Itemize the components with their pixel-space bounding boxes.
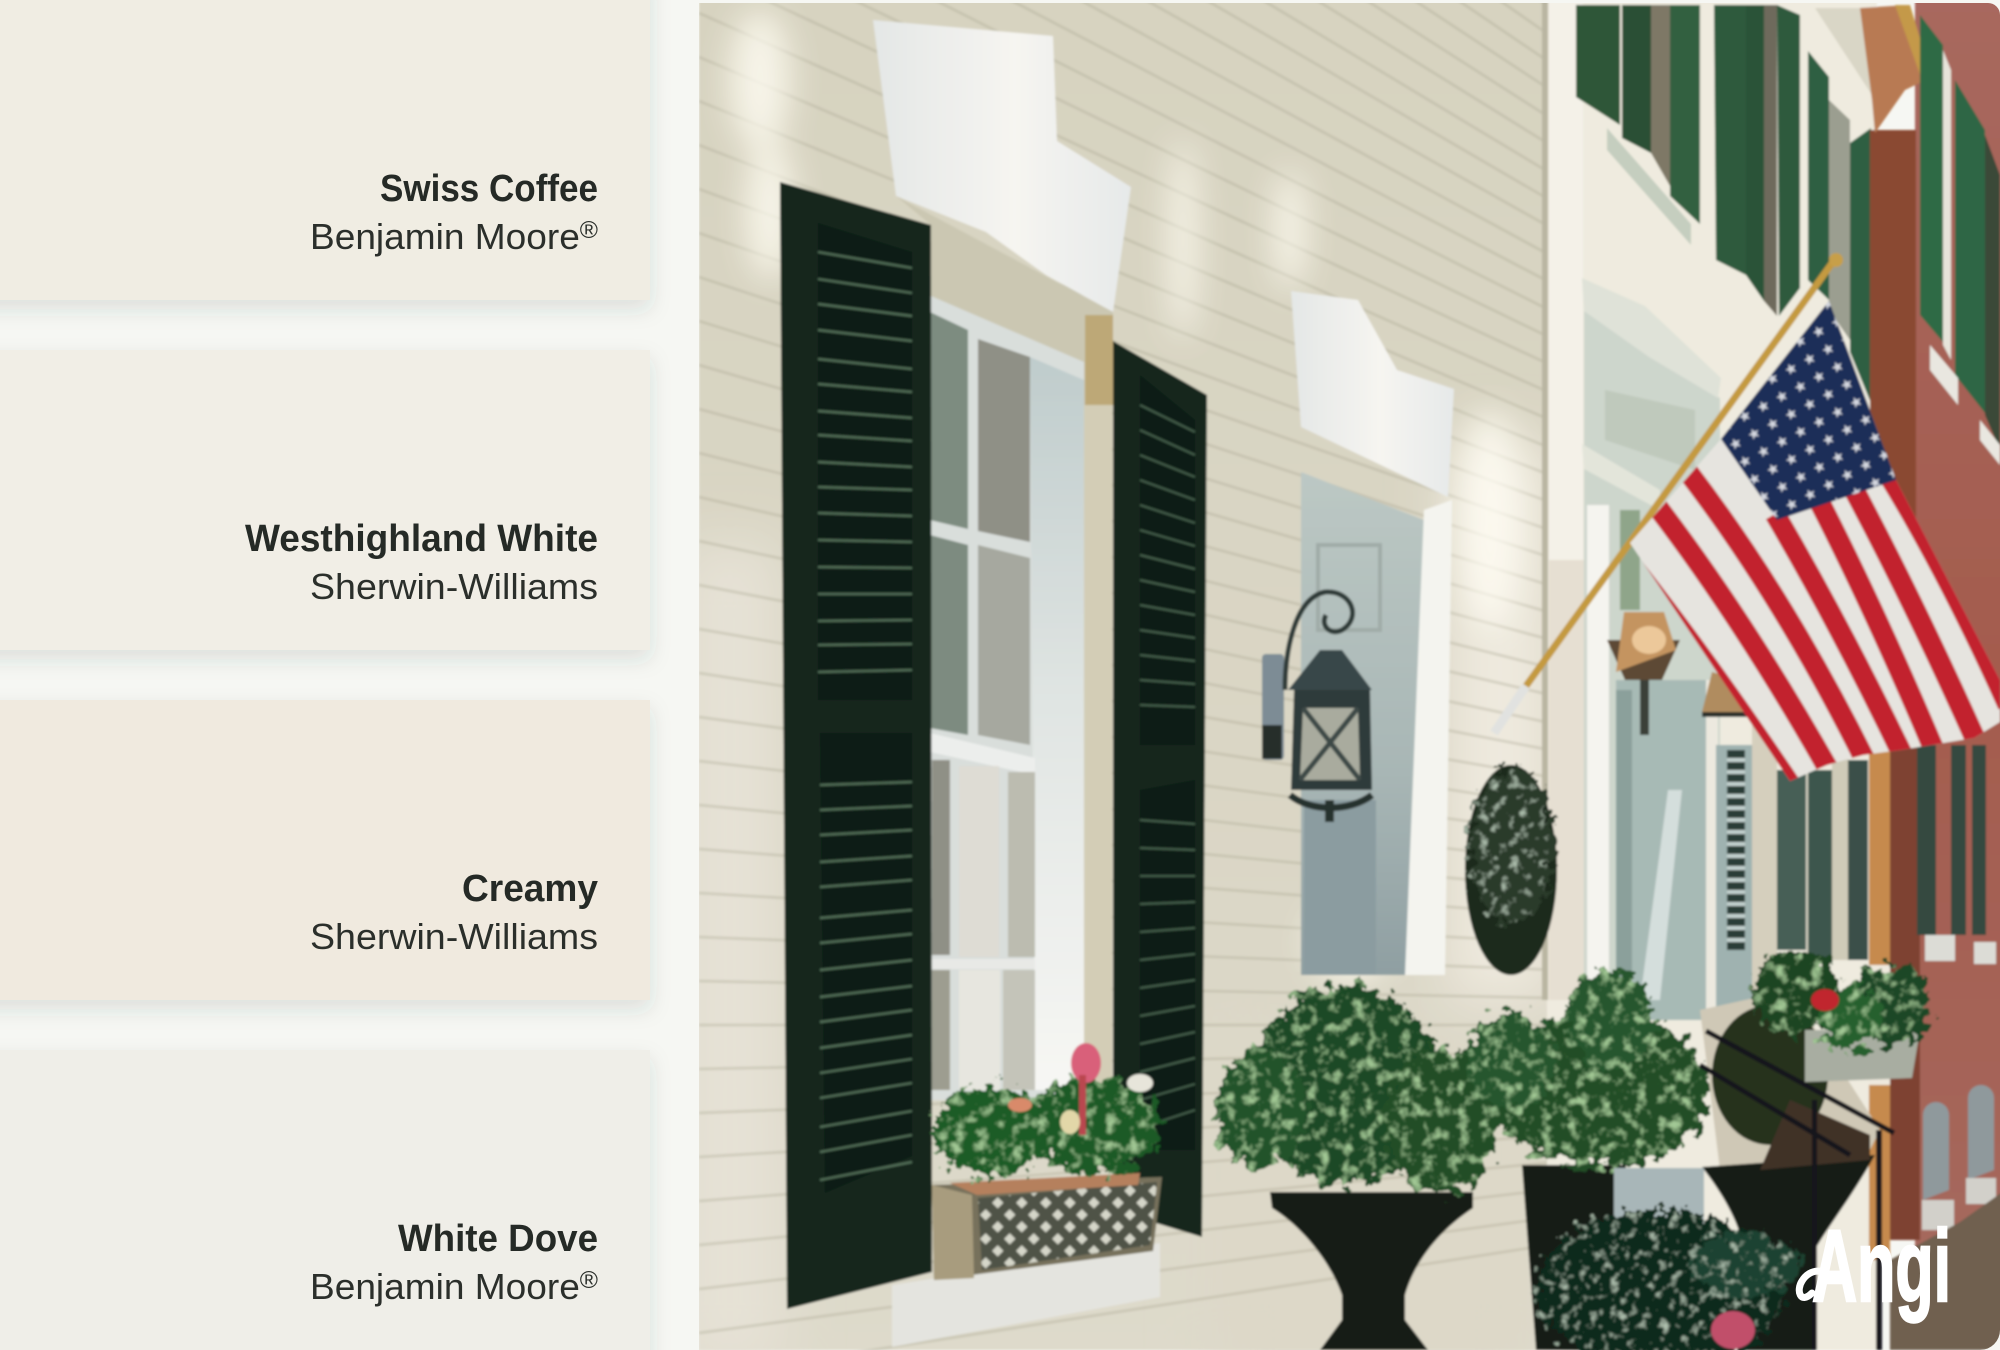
panel: Creamy swatch bbox=[0, 700, 650, 1000]
window sill bbox=[892, 1243, 1160, 1350]
logo: Angi bbox=[1796, 1226, 1948, 1324]
colour name: White Dove: White Dove bbox=[398, 1218, 598, 1260]
brand: Benjamin Moore: Benjamin Moore bbox=[310, 1266, 572, 1307]
brand: Benjamin Moore: ® bbox=[580, 1267, 598, 1294]
flower box bbox=[932, 1173, 1162, 1280]
panel: Westhighland White swatch bbox=[0, 350, 650, 650]
lower louvered shutters bbox=[1716, 720, 1868, 1020]
flag pole bbox=[1494, 253, 1843, 733]
American flag bbox=[1622, 301, 2000, 790]
potted bush: right with stair railing bbox=[1700, 990, 1894, 1350]
sidewalk bbox=[1890, 1190, 2000, 1350]
left shutter bbox=[780, 182, 932, 1309]
door surround and cornice bbox=[1582, 278, 1721, 1020]
panel: White Dove swatch bbox=[0, 1050, 650, 1350]
right building: white facade bbox=[1542, 0, 1877, 1350]
brand: Benjamin Moore: ® bbox=[580, 217, 598, 244]
foreground foliage bbox=[1535, 1168, 1800, 1350]
right shutter bbox=[1113, 341, 1207, 1237]
potted bush: left bbox=[1215, 985, 1500, 1350]
upper green shutters bbox=[1576, 5, 1890, 403]
potted bush: centre bbox=[1465, 970, 1710, 1350]
door bbox=[1301, 472, 1452, 975]
colour name: Swiss Coffee: Swiss Coffee bbox=[380, 168, 598, 210]
colour name: Creamy: Creamy bbox=[462, 868, 598, 910]
wall lantern bbox=[1262, 592, 1372, 822]
brand: Sherwin-Williams: Sherwin-Williams bbox=[310, 916, 598, 957]
lintel above left window bbox=[873, 20, 1131, 312]
lintel above door bbox=[1291, 291, 1454, 497]
wreath bbox=[1465, 765, 1557, 975]
brand: Sherwin-Williams: Sherwin-Williams bbox=[310, 566, 598, 607]
panel: Swiss Coffee swatch bbox=[0, 0, 650, 300]
lanterns near flag bbox=[1607, 612, 1748, 735]
hanging window box bbox=[1751, 950, 1930, 1082]
colour name: Westhighland White: Westhighland White bbox=[245, 518, 598, 560]
window box flowers bbox=[932, 1043, 1160, 1176]
photo: white brick house with black shutters and American flag bbox=[680, 0, 2000, 1350]
left window bbox=[896, 196, 1113, 1100]
brand: Benjamin Moore: Benjamin Moore bbox=[310, 216, 572, 257]
right brick building bbox=[1860, 0, 2000, 1350]
brick wall bbox=[680, 0, 1559, 1350]
